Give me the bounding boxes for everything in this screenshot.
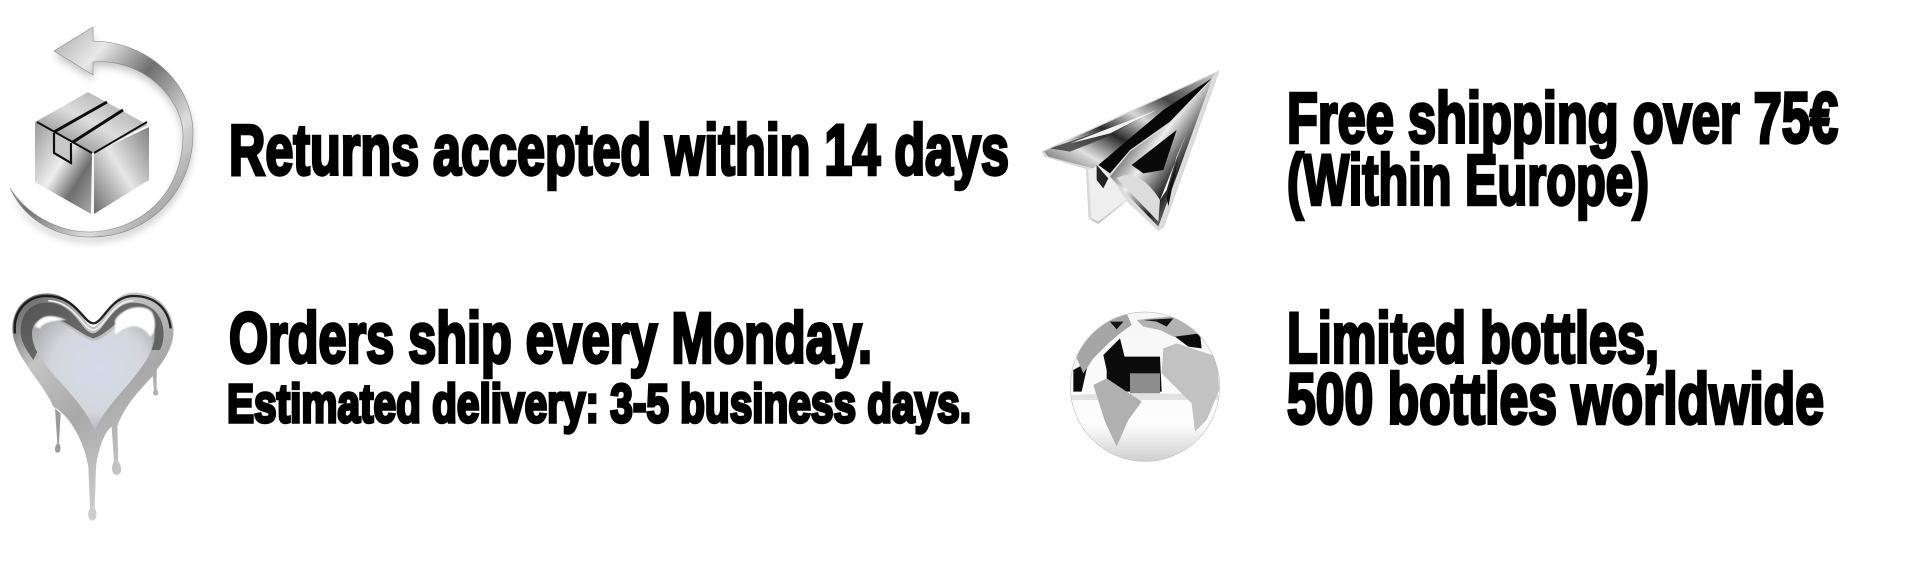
heading: limited bottles: Limited bottles, [1287,300,1659,378]
text: returns: Returns accepted within 14 days [229,112,1009,190]
text: orders ship [227,300,971,434]
text: free shipping [1287,80,1838,220]
icon: package return [10,27,193,242]
icon: chrome paper plane [1043,72,1218,230]
heading: orders ship every Monday: Orders ship every Monday. [229,300,872,378]
subtext: estimated delivery: Estimated delivery: 3-5 business days. [227,374,971,434]
subtext: within Europe: (Within Europe) [1287,142,1649,220]
icon: melting heart [12,293,174,521]
text: limited bottles [1287,300,1824,440]
icon: chrome globe [1070,312,1220,462]
